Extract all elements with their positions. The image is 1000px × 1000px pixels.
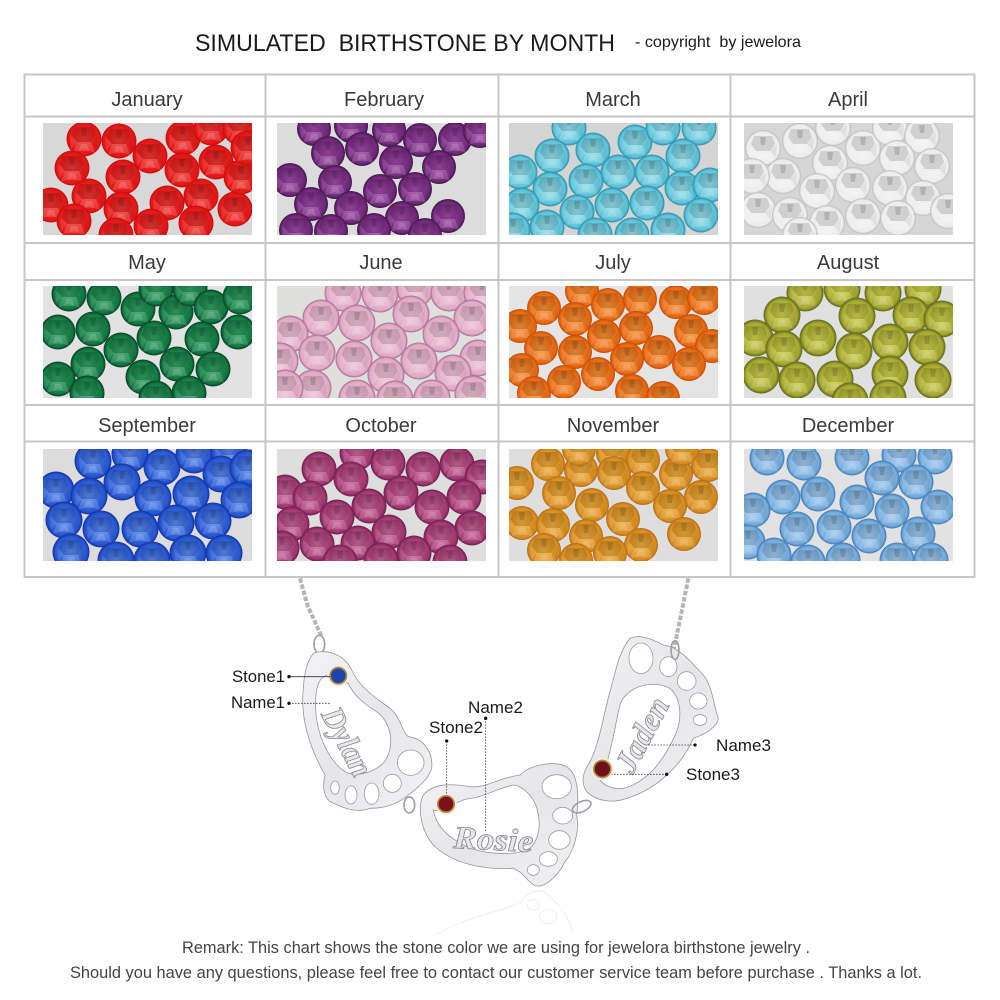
name: Rosie: Rosie	[451, 819, 534, 859]
label: February: February	[344, 89, 424, 111]
panel: July	[509, 254, 718, 398]
label: Stone1: Stone1	[232, 668, 285, 686]
panel: February	[277, 91, 486, 235]
swatch: February purple stones	[277, 123, 486, 235]
label: May: May	[128, 252, 166, 274]
name: Dylan: Dylan	[314, 700, 381, 782]
leader lines	[287, 675, 697, 832]
label: July: July	[595, 252, 631, 274]
swatch: September blue stones	[43, 449, 252, 561]
remark line 2: Should you have any questions, please feel free to contact our customer service team before purchase . Thanks a lot.	[70, 964, 922, 982]
centre foot pendant	[404, 764, 593, 886]
stone 3 dark red	[591, 758, 614, 780]
right chain	[674, 578, 688, 648]
label: Name3: Name3	[716, 737, 771, 755]
label: October: October	[345, 415, 417, 437]
label: Name2: Name2	[468, 699, 523, 717]
swatch: August olive stones	[744, 286, 953, 398]
stone 1 blue	[327, 665, 349, 687]
label: Stone2: Stone2	[429, 719, 483, 737]
copyright note: - copyright by jewelora	[635, 34, 801, 51]
label: March: March	[585, 89, 641, 111]
panel: September	[43, 417, 252, 561]
panel: November	[509, 417, 718, 561]
label: January: January	[111, 89, 183, 111]
left chain	[300, 578, 322, 637]
remark line 1: Remark: This chart shows the stone color we are using for jewelora birthstone jewelry .	[182, 939, 810, 957]
birthstone table grid	[24, 74, 975, 577]
label: Stone3: Stone3	[686, 766, 740, 784]
panel: October	[277, 417, 486, 561]
necklace illustration	[287, 578, 718, 934]
swatch: July orange stones	[509, 286, 718, 398]
swatch: June pink stones	[277, 286, 486, 398]
label: June: June	[359, 252, 403, 274]
stone 2 dark red	[435, 793, 457, 815]
label: April: April	[828, 89, 868, 111]
reflection of centre foot	[437, 891, 573, 934]
swatch: April clear stones	[744, 123, 953, 235]
label: September: September	[98, 415, 196, 437]
left foot pendant	[303, 635, 432, 810]
label: August: August	[817, 252, 880, 274]
label: Name1: Name1	[231, 694, 285, 712]
panel: June	[277, 255, 486, 398]
panel: May	[43, 255, 252, 398]
name: Jaden: Jaden	[607, 691, 676, 779]
panel: March	[509, 91, 718, 235]
swatch: December light blue stones	[744, 449, 953, 561]
panel: April	[744, 91, 953, 235]
panel: January	[43, 92, 252, 235]
swatch: November amber stones	[509, 449, 718, 561]
label: December: December	[802, 415, 894, 437]
swatch: January red stones	[43, 123, 252, 235]
swatch: May green stones	[43, 286, 252, 398]
panel: August	[744, 255, 953, 398]
title: SIMULATED BIRTHSTONE BY MONTH	[195, 30, 615, 57]
panel: December	[744, 417, 953, 561]
label: November: November	[567, 415, 659, 437]
swatch: October rose stones	[277, 449, 486, 561]
right foot pendant	[583, 637, 718, 801]
swatch: March aqua stones	[509, 123, 718, 235]
